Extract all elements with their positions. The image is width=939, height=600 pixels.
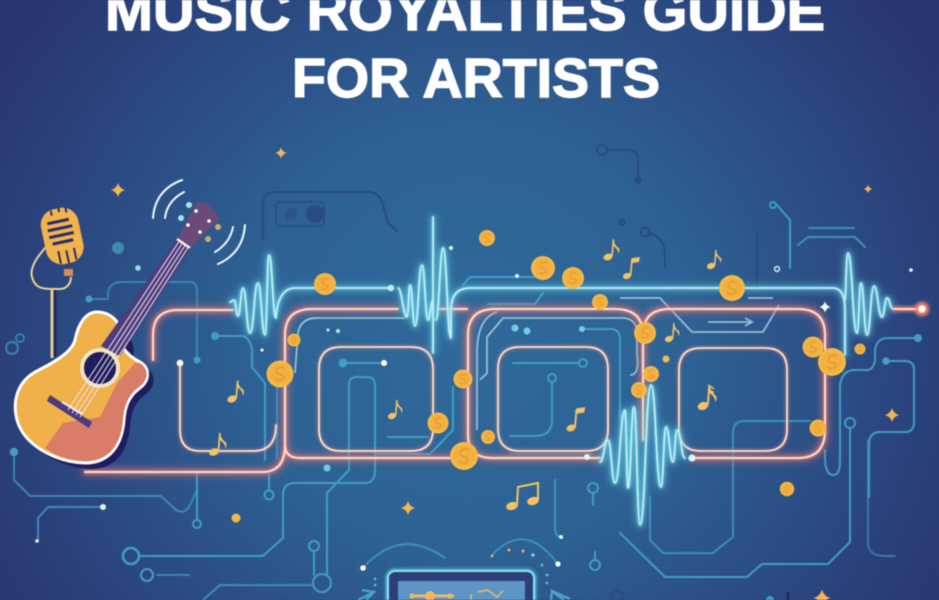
icon: guitar with sound waves [15,180,245,469]
gold sparkle stars [111,147,899,600]
waveforms with cyan neon glow [230,217,893,525]
gold coins [266,230,866,496]
title [105,0,825,109]
music notes [208,239,721,511]
blue circuit traces [6,202,921,600]
glowing and small nodes [35,242,913,586]
bottom right fragments [766,592,788,600]
pale circuit lines inside panels [295,298,779,430]
dark faded circuit traces [263,145,791,600]
icon: laptop monitor with dashboard [388,571,534,600]
output line and end node [893,302,929,316]
arrows into monitor [358,590,570,600]
panel: royalty flow frames with pink neon glow [85,309,825,472]
title: FOR ARTISTS [292,47,660,109]
icon: microphone on stand [31,204,87,358]
